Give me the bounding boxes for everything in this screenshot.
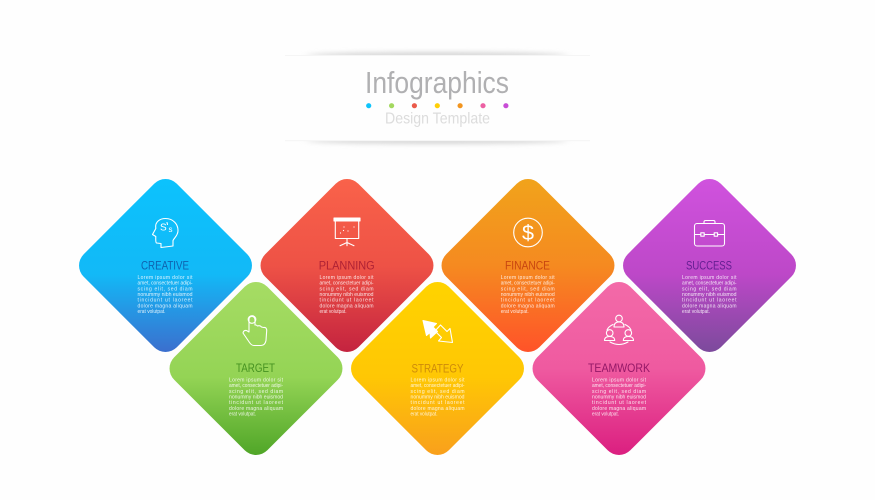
text block: Lorem ipsum dolor sit <box>592 378 647 384</box>
text block: erat volutpat. <box>138 309 166 315</box>
text block: nonummy nibh euismod <box>501 292 555 298</box>
icon: head with money thoughts <box>152 218 178 248</box>
text block: Lorem ipsum dolor sit <box>501 275 555 281</box>
text block: nonummy nibh euismod <box>592 394 646 400</box>
icon: head with money thoughts: s <box>168 225 172 234</box>
text block: Lorem ipsum dolor sit <box>320 275 374 281</box>
heading: SUCCESS <box>686 260 732 272</box>
text block: dolore magna aliquam <box>138 303 192 309</box>
text block: scing elit, sed diam <box>501 286 555 292</box>
text block: erat volutpat. <box>410 412 438 418</box>
text block <box>592 378 647 418</box>
text block: amet, consectetuer adipi- <box>138 281 193 287</box>
text block: amet, consectetuer adipi- <box>501 281 555 287</box>
text block: nonummy nibh euismod <box>138 292 193 298</box>
icon: briefcase <box>694 220 724 246</box>
text block: dolore magna aliquam <box>592 406 646 412</box>
text block: nonummy nibh euismod <box>320 292 374 298</box>
panel: creative <box>79 179 252 352</box>
text block <box>320 275 374 315</box>
heading: FINANCE <box>505 260 550 272</box>
text block: tincidunt ut laoreet <box>592 400 647 406</box>
text block: scing elit, sed diam <box>592 389 646 395</box>
text block <box>229 378 284 418</box>
text block: tincidunt ut laoreet <box>410 400 465 406</box>
text block: scing elit, sed diam <box>320 286 374 292</box>
panel: success <box>623 179 796 352</box>
text block: tincidunt ut laoreet <box>501 298 555 304</box>
heading: PLANNING <box>319 260 375 272</box>
text block <box>682 275 737 315</box>
text block: amet, consectetuer adipi- <box>410 383 465 389</box>
icon: head with money thoughts: S <box>160 222 167 234</box>
text block: Lorem ipsum dolor sit <box>138 275 193 281</box>
icon: dollar coin: $ <box>522 222 534 245</box>
text block: scing elit, sed diam <box>682 286 736 292</box>
panel: planning <box>261 179 433 352</box>
panel: strategy <box>351 282 524 455</box>
text block: scing elit, sed diam <box>410 389 464 395</box>
text block: erat volutpat. <box>229 412 256 418</box>
text block: tincidunt ut laoreet <box>682 298 737 304</box>
text block: nonummy nibh euismod <box>410 394 465 400</box>
panel: target <box>170 282 342 455</box>
text block <box>410 378 465 418</box>
panel: teamwork <box>533 282 705 455</box>
text block: Lorem ipsum dolor sit <box>410 378 465 384</box>
text block: tincidunt ut laoreet <box>229 400 284 406</box>
heading: CREATIVE <box>141 260 189 272</box>
header band <box>285 52 590 144</box>
text block: erat volutpat. <box>592 412 619 418</box>
heading: STRATEGY <box>412 364 464 376</box>
heading: TEAMWORK <box>588 363 650 375</box>
text block: Lorem ipsum dolor sit <box>682 275 737 281</box>
text block: tincidunt ut laoreet <box>138 298 193 304</box>
text block: nonummy nibh euismod <box>682 292 737 298</box>
text block: amet, consectetuer adipi- <box>682 281 737 287</box>
heading: TARGET <box>236 363 275 375</box>
colour dots row <box>366 103 508 108</box>
text block: dolore magna aliquam <box>410 406 464 412</box>
text block: Lorem ipsum dolor sit <box>229 378 284 384</box>
icon: three people circle <box>604 315 634 344</box>
text block: nonummy nibh euismod <box>229 394 283 400</box>
text block: dolore magna aliquam <box>501 303 555 309</box>
title: Infographics <box>365 65 509 100</box>
icon: presentation board <box>334 218 360 246</box>
icon: dollar coin <box>514 218 542 247</box>
text block <box>138 275 193 315</box>
panel: finance <box>442 179 614 352</box>
text block: amet, consectetuer adipi- <box>229 383 283 389</box>
text block: amet, consectetuer adipi- <box>592 383 646 389</box>
text block <box>501 275 555 315</box>
text block: erat volutpat. <box>320 309 346 315</box>
icon: pointing hand <box>243 316 267 346</box>
text block: erat volutpat. <box>682 309 710 315</box>
text block: dolore magna aliquam <box>320 303 374 309</box>
text block: amet, consectetuer adipi- <box>320 281 374 287</box>
text block: erat volutpat. <box>501 309 529 315</box>
text block: tincidunt ut laoreet <box>320 298 374 304</box>
text block: dolore magna aliquam <box>682 303 736 309</box>
text block: scing elit, sed diam <box>229 389 283 395</box>
subtitle: Design Template <box>385 110 490 128</box>
text block: scing elit, sed diam <box>138 286 193 292</box>
text block: dolore magna aliquam <box>229 406 283 412</box>
icon: opposing arrows <box>423 320 452 342</box>
